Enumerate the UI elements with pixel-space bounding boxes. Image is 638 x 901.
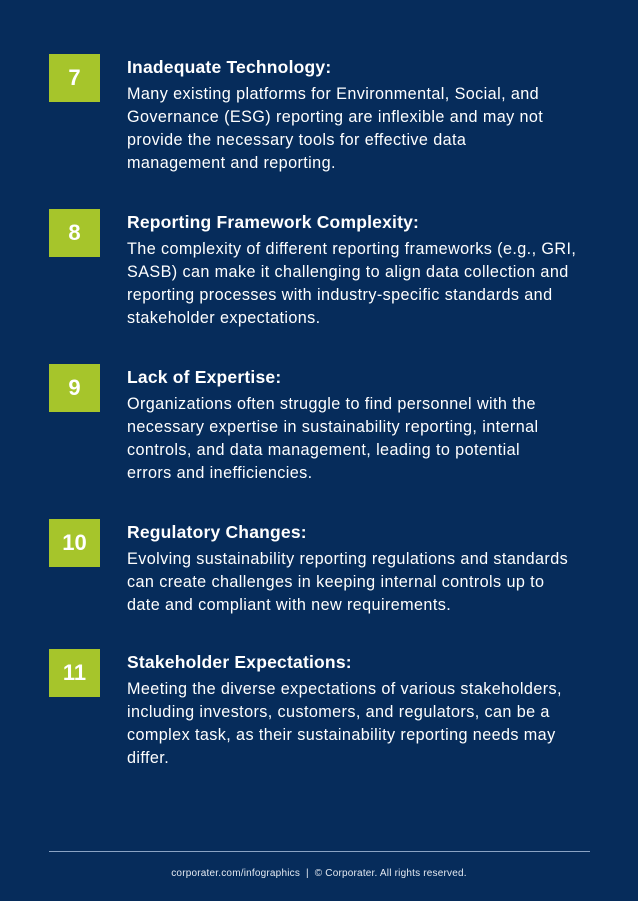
body text: including investors, customers, and regulators, can be a — [127, 703, 550, 721]
item 11 — [49, 649, 562, 767]
body text: The complexity of different reporting frameworks (e.g., GRI, — [127, 240, 576, 258]
body text: stakeholder expectations. — [127, 309, 321, 327]
body text — [127, 85, 543, 172]
badge 7 — [49, 54, 100, 102]
badge 11: 11 — [63, 660, 86, 685]
body text: date and compliant with new requirements. — [127, 596, 451, 614]
body text — [127, 550, 568, 614]
heading: Stakeholder Expectations: — [127, 652, 352, 672]
heading: Lack of Expertise: — [127, 367, 281, 387]
badge 8: 8 — [68, 220, 81, 245]
body text: Many existing platforms for Environmental, Social, and — [127, 85, 539, 103]
heading: Inadequate Technology: — [127, 57, 331, 77]
item 7 — [49, 54, 543, 172]
item 8 — [49, 209, 576, 327]
badge 9: 9 — [68, 375, 81, 400]
heading: Regulatory Changes: — [127, 522, 307, 542]
badge 11 — [49, 649, 100, 697]
body text: complex task, as their sustainability reporting needs may — [127, 726, 556, 744]
footer: corporater.com/infographics | © Corporater. All rights reserved. — [171, 868, 467, 879]
body text — [127, 680, 562, 767]
body text: SASB) can make it challenging to align data collection and — [127, 263, 569, 281]
item 10 — [49, 519, 568, 614]
badge 10 — [49, 519, 100, 567]
heading: Reporting Framework Complexity: — [127, 212, 419, 232]
body text: necessary expertise in sustainability reporting, internal — [127, 418, 538, 436]
body text: can create challenges in keeping internal controls up to — [127, 573, 544, 591]
badge 7: 7 — [68, 65, 81, 90]
body text: Evolving sustainability reporting regulations and standards — [127, 550, 568, 568]
body text: differ. — [127, 749, 169, 767]
body text: Organizations often struggle to find personnel with the — [127, 395, 536, 413]
body text: provide the necessary tools for effective data — [127, 131, 466, 149]
body text: reporting processes with industry-specific standards and — [127, 286, 552, 304]
body text: controls, and data management, leading to potential — [127, 441, 520, 459]
body text: Meeting the diverse expectations of various stakeholders, — [127, 680, 562, 698]
body text — [127, 240, 576, 327]
body text: management and reporting. — [127, 154, 336, 172]
item 9 — [49, 364, 538, 482]
badge 9 — [49, 364, 100, 412]
body text — [127, 395, 538, 482]
badge 10: 10 — [62, 530, 87, 555]
body text: Governance (ESG) reporting are inflexible and may not — [127, 108, 543, 126]
body text: errors and inefficiencies. — [127, 464, 313, 482]
badge 8 — [49, 209, 100, 257]
